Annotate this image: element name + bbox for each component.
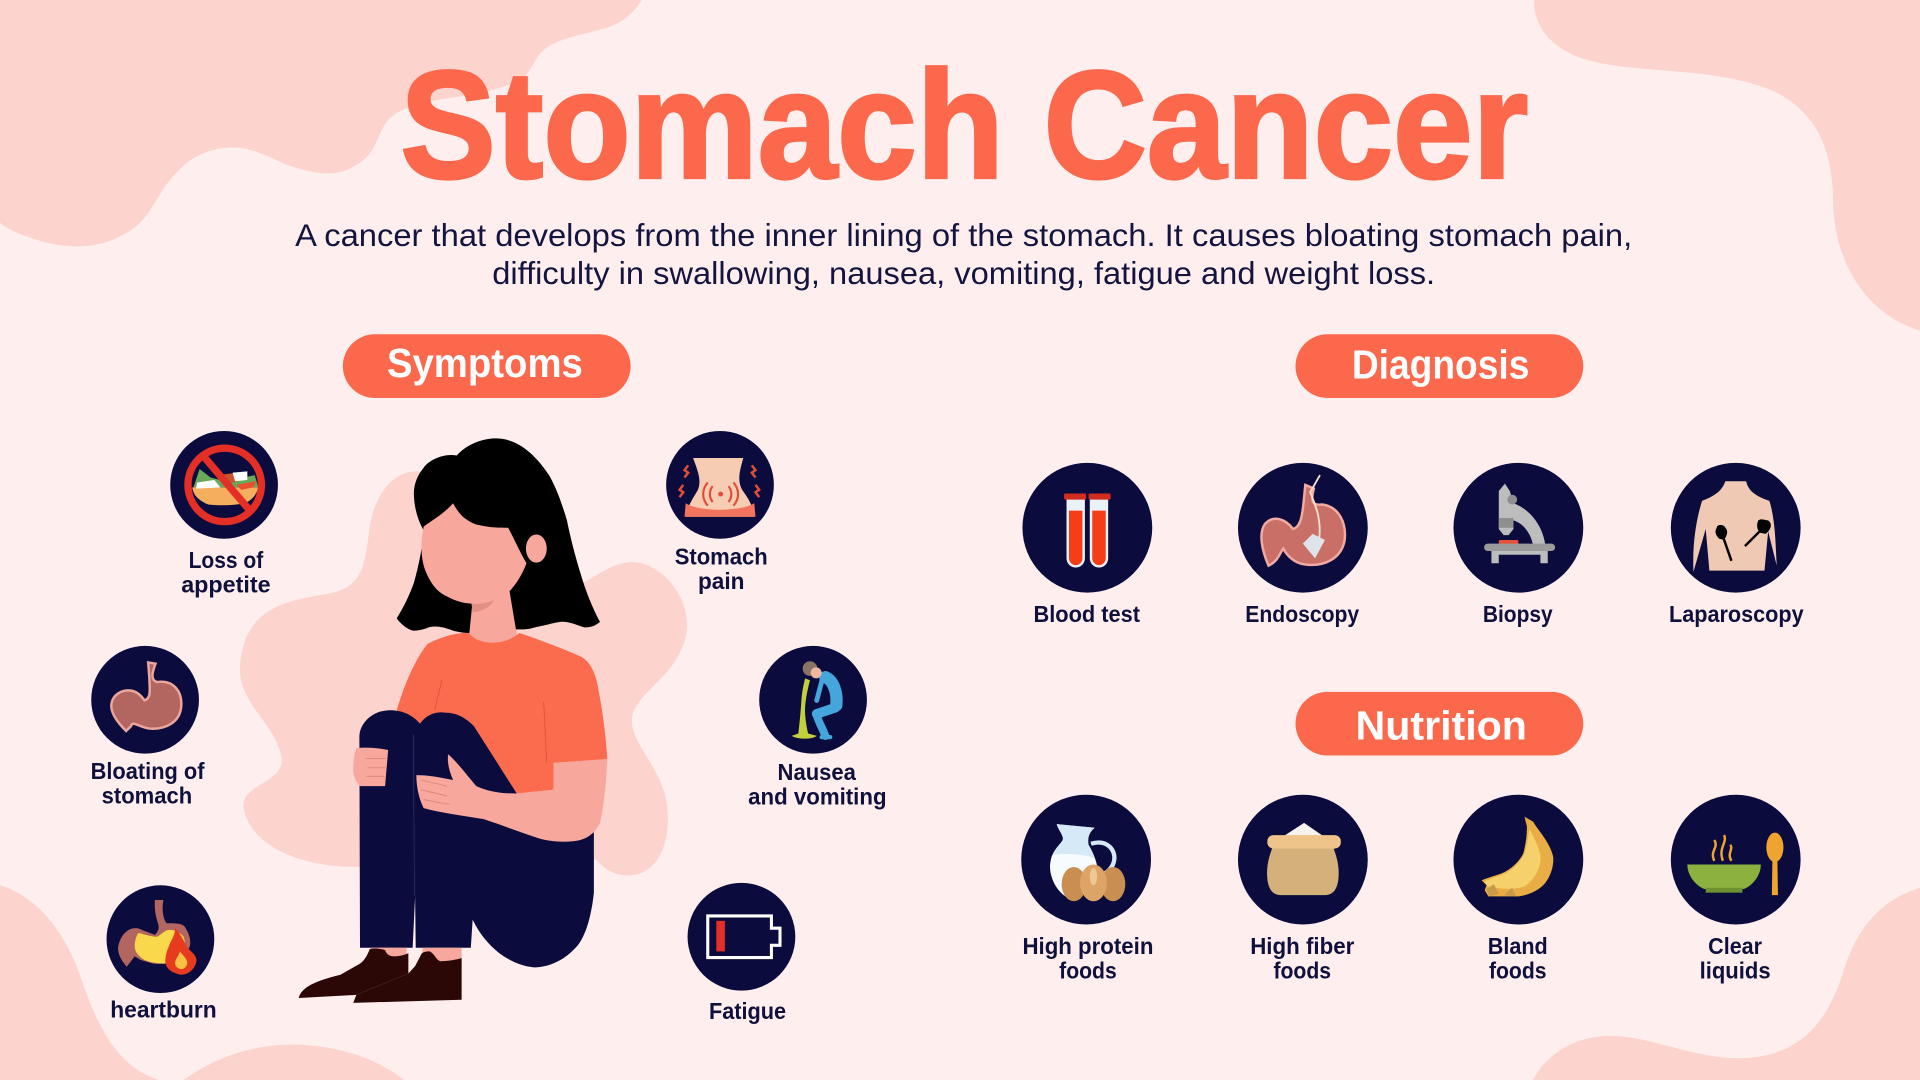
label: bloating of stomach: stomach (102, 782, 192, 808)
intro text: difficulty in swallowing, nausea, vomiting, fatigue and weight loss. (492, 255, 1435, 291)
intro text: A cancer that develops from the inner lining of the stomach. It causes bloating stomach pain, (295, 217, 1632, 253)
icon: endoscopy (1238, 463, 1368, 593)
icon: laparoscopy (1671, 463, 1801, 593)
icon: bland foods banana (1453, 795, 1583, 924)
icon: fatigue battery (688, 883, 795, 991)
label: stomach pain (675, 543, 768, 594)
label: bland foods: Bland (1488, 933, 1548, 959)
hand (353, 748, 388, 786)
label: high protein foods (1022, 933, 1153, 983)
ankles (371, 948, 462, 967)
icon: clear liquids (1671, 795, 1801, 924)
label: clear liquids: liquids (1700, 957, 1771, 983)
label: bland foods (1488, 933, 1548, 983)
label: biopsy: Biopsy (1483, 601, 1553, 627)
legs (359, 710, 594, 967)
heading: diagnosis (1296, 334, 1583, 398)
label: high protein foods: High protein (1022, 933, 1153, 959)
heading: nutrition: Nutrition (1356, 703, 1527, 749)
label: high protein foods: foods (1059, 957, 1117, 983)
label: clear liquids: Clear (1708, 933, 1762, 959)
icon: high protein foods (1021, 795, 1151, 924)
label: nausea and vomiting: Nausea (778, 759, 856, 785)
illustration: seated woman (240, 438, 687, 1003)
label: loss of appetite (181, 547, 271, 598)
label: fatigue: Fatigue (709, 998, 786, 1024)
icon: bloating of stomach (91, 646, 199, 754)
heading: symptoms (343, 334, 631, 398)
ear (526, 534, 547, 563)
label: high fiber foods (1250, 933, 1354, 983)
neck (468, 590, 519, 649)
label: nausea and vomiting: and vomiting (748, 783, 887, 809)
face (421, 503, 527, 604)
heading: nutrition (1296, 692, 1583, 756)
label: endoscopy: Endoscopy (1245, 601, 1360, 627)
icon: blood test (1022, 463, 1152, 593)
label: loss of appetite: appetite (181, 572, 271, 598)
hair (397, 438, 600, 633)
label: stomach pain: Stomach (675, 543, 768, 569)
arm (416, 754, 607, 842)
label: nausea and vomiting (748, 759, 887, 809)
icon: nausea and vomiting (759, 646, 867, 754)
label: laparoscopy: Laparoscopy (1669, 601, 1804, 627)
label: heartburn: heartburn (110, 997, 217, 1023)
heading: diagnosis: Diagnosis (1352, 341, 1529, 387)
label: blood test: Blood test (1033, 601, 1140, 627)
shoes (299, 948, 408, 998)
label: loss of appetite: Loss of (189, 547, 264, 573)
heading: symptoms: Symptoms (387, 340, 583, 386)
shirt (397, 633, 607, 793)
title: Stomach Cancer (400, 40, 1528, 211)
icon: high fiber foods (1238, 795, 1368, 924)
intro text (295, 217, 1632, 291)
icon: loss of appetite (170, 431, 278, 539)
label: high fiber foods: High fiber (1250, 933, 1354, 959)
label: stomach pain: pain (698, 568, 744, 594)
label: bloating of stomach: Bloating of (91, 758, 205, 784)
icon: stomach pain (666, 431, 774, 539)
icon: heartburn (107, 885, 214, 993)
label: bland foods: foods (1489, 957, 1547, 983)
label: bloating of stomach (91, 758, 205, 808)
label: high fiber foods: foods (1273, 957, 1331, 983)
label: clear liquids (1700, 933, 1771, 983)
icon: biopsy microscope (1453, 463, 1583, 593)
